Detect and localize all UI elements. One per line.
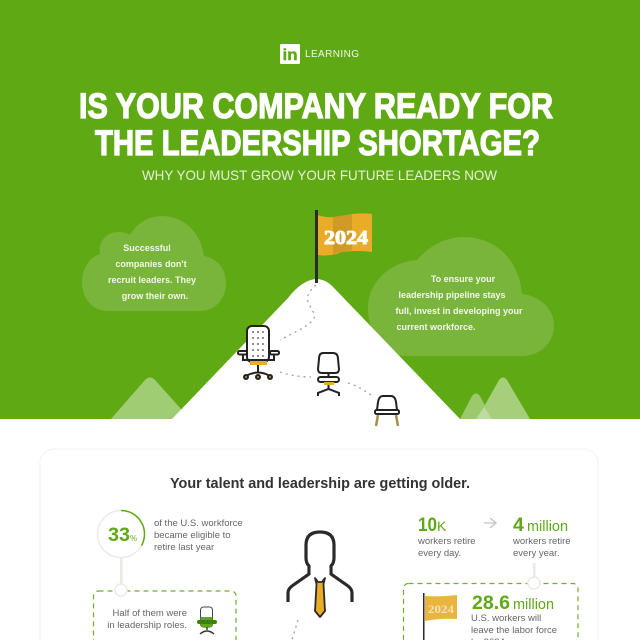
icon: LinkedIn Learning logo (280, 44, 359, 64)
path: dashed trail up the mountain (280, 285, 371, 395)
panel: left dashed box: in leadership roles. (107, 620, 187, 631)
panel: left cloud callout: companies don't (115, 259, 187, 269)
panel: left cloud callout: recruit leaders. They (108, 275, 196, 285)
stat: 10K workers per day: every day. (418, 548, 461, 559)
icon: small 2024 flag (423, 593, 457, 640)
illustration: white mountain (172, 279, 460, 419)
connector: right timeline (533, 563, 536, 583)
panel: right dashed box (404, 577, 578, 640)
panel: right cloud callout: full, invest in developing your (395, 306, 523, 316)
stat: 4 million workers per year: workers retire (512, 536, 571, 547)
connector: left timeline (120, 558, 122, 590)
icon: leader silhouette with tie (288, 532, 352, 617)
path: dashed trail below leader (292, 620, 298, 640)
icon: 2024 flag: 2024 (324, 227, 368, 249)
stat: 4 million workers per year: every year. (513, 548, 559, 559)
panel: right cloud callout: To ensure your (431, 274, 496, 284)
icon: executive chair (238, 326, 279, 379)
chart: 33 percent donut (98, 510, 145, 558)
panel: left cloud callout: grow their own. (122, 291, 188, 301)
text: workforce eligible (154, 518, 243, 553)
stat: 4 million workers per year: million (527, 519, 568, 535)
text: workforce eligible: retire last year (154, 542, 214, 553)
panel: talent card (40, 449, 598, 640)
stat: 10K workers per day: K (437, 518, 447, 534)
panel: right dashed box: million (513, 597, 554, 613)
stat: 4 million workers per year: 4 (513, 514, 524, 536)
stat: 10K workers per day: workers retire (417, 536, 476, 547)
icon: 2024 flag (315, 210, 372, 283)
title: IS YOUR COMPANY READY FOR (79, 87, 553, 126)
panel: left dashed box (94, 584, 236, 640)
stat: 10K workers per day (417, 514, 476, 559)
icon: left background hill (111, 378, 190, 419)
panel: left cloud callout: Successful (123, 243, 171, 253)
text: workforce eligible: of the U.S. workforce (154, 518, 243, 529)
panel: right cloud callout (368, 237, 554, 356)
icon: simple chair (375, 396, 399, 426)
text: workforce eligible: became eligible to (154, 530, 231, 541)
panel: right dashed box: 28.6 (472, 592, 510, 614)
panel: left cloud callout (82, 216, 226, 311)
arrow: 10K to 4 million (484, 518, 496, 528)
stat: 10K workers per day: 10 (418, 514, 437, 536)
title: THE LEADERSHIP SHORTAGE? (95, 124, 540, 163)
chart: 33 percent donut: % (130, 534, 137, 543)
icon: half green chair (197, 607, 217, 634)
icon: right background hills (460, 378, 530, 419)
icon: small 2024 flag: 2024 (428, 602, 454, 616)
subtitle: WHY YOU MUST GROW YOUR FUTURE LEADERS NOW (142, 167, 498, 183)
panel: right cloud callout: current workforce. (396, 322, 476, 332)
heading: talent and leadership: Your talent and leadership are getting older. (170, 476, 470, 492)
title (79, 87, 553, 163)
stat: 4 million workers per year (512, 514, 571, 559)
chart: 33 percent donut: 33 (108, 525, 130, 546)
panel: right cloud callout: leadership pipeline stays (398, 290, 506, 300)
panel: green hero background (0, 0, 640, 419)
icon: office chair (318, 353, 339, 396)
panel: left dashed box: Half of them were (113, 608, 187, 619)
panel: right dashed box: U.S. workers will (471, 613, 541, 624)
icon: LinkedIn Learning logo: in (282, 47, 298, 64)
icon: LinkedIn Learning logo: LEARNING (305, 49, 359, 60)
panel: right dashed box: leave the labor force (471, 625, 557, 636)
